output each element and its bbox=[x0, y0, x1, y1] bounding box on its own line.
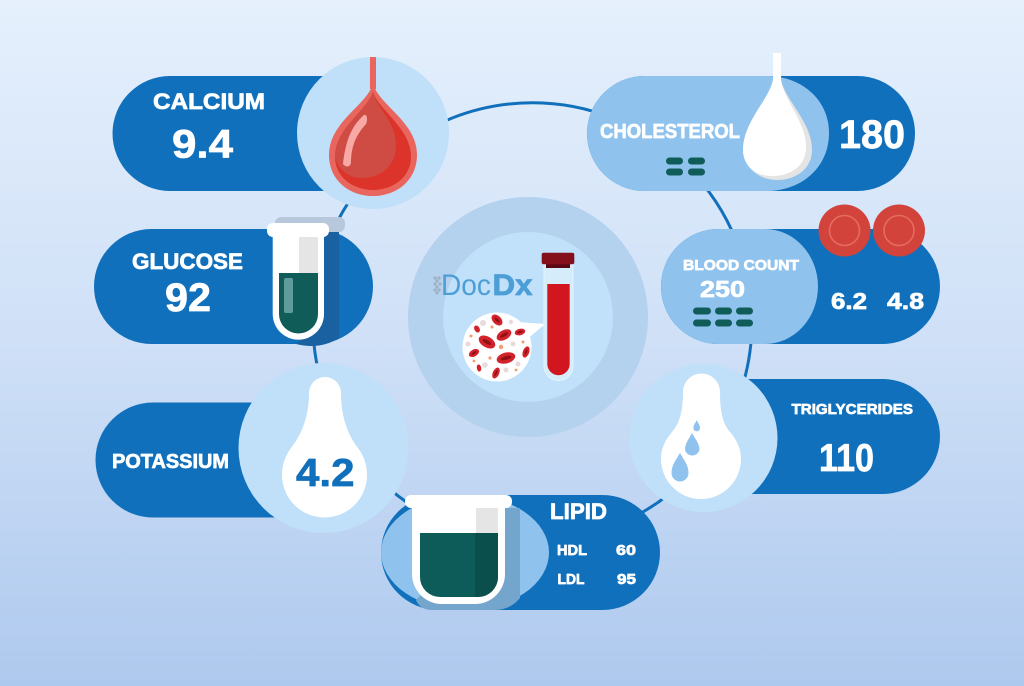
icon: red blood cell one bbox=[818, 204, 870, 256]
panel: center logo and blood sample bbox=[408, 197, 648, 437]
value: glucose: 92 bbox=[165, 276, 211, 320]
pill background bbox=[661, 229, 940, 344]
value: 250: 250 bbox=[700, 276, 745, 302]
icon: lipid beaker bbox=[405, 495, 512, 604]
label: LDL: LDL bbox=[558, 571, 584, 588]
panel: blood count bbox=[661, 204, 940, 344]
icon: blood test tube bbox=[542, 253, 574, 380]
value: LDL: 95 bbox=[617, 571, 636, 588]
panel: lipid bbox=[381, 495, 660, 610]
icon circle bbox=[238, 363, 408, 533]
icon: blood count dashes bbox=[693, 308, 753, 326]
icon: glucose tube bbox=[267, 223, 329, 340]
icon: white bulb bbox=[282, 377, 367, 517]
value: cholesterol: 180 bbox=[839, 113, 905, 157]
label: triglycerides: TRIGLYCERIDES bbox=[792, 401, 913, 418]
icon: magnified blood cells bbox=[462, 312, 545, 382]
label: lipid: LIPID bbox=[550, 499, 607, 524]
panel: potassium bbox=[95, 363, 408, 533]
icon: white drop bbox=[743, 53, 812, 180]
pill background bbox=[113, 76, 340, 191]
light end bbox=[381, 495, 549, 610]
label: cholesterol: CHOLESTEROL bbox=[600, 121, 740, 143]
inner circle bbox=[443, 232, 613, 402]
icon: red blood cell two bbox=[873, 204, 925, 256]
value: 4.8: 4.8 bbox=[887, 288, 924, 314]
logo wordmark: Dx: Dx bbox=[492, 269, 533, 302]
value: 6.2: 6.2 bbox=[831, 288, 867, 314]
connecting ring bbox=[313, 103, 752, 542]
light section bbox=[587, 76, 829, 191]
icon circle bbox=[297, 57, 449, 209]
value: calcium: 9.4 bbox=[172, 122, 234, 166]
panel: calcium bbox=[113, 57, 449, 209]
value: HDL: 60 bbox=[616, 542, 636, 559]
label: HDL: HDL bbox=[557, 542, 587, 559]
label: glucose: GLUCOSE bbox=[132, 249, 243, 274]
pill background bbox=[381, 495, 660, 610]
logo: DocDx bbox=[433, 269, 533, 302]
icon: blood drop bbox=[329, 57, 417, 196]
tube shadow bbox=[296, 229, 339, 346]
icon circle bbox=[630, 364, 778, 512]
pill background bbox=[587, 76, 915, 191]
pill background bbox=[94, 229, 373, 344]
icon: white bulb with drops bbox=[661, 374, 741, 499]
light section bbox=[661, 229, 818, 344]
outer circle bbox=[408, 197, 648, 437]
label: blood count: BLOOD COUNT bbox=[683, 257, 799, 274]
panel: cholesterol bbox=[587, 53, 915, 191]
panel: glucose bbox=[94, 217, 373, 346]
label: potassium: POTASSIUM bbox=[112, 451, 229, 473]
value: triglycerides: 110 bbox=[819, 437, 874, 480]
beaker shadow bbox=[416, 508, 520, 610]
pill background bbox=[740, 379, 940, 494]
icon: DNA mark bbox=[433, 276, 442, 295]
value: potassium: 4.2 bbox=[296, 452, 354, 495]
label: calcium: CALCIUM bbox=[153, 89, 265, 114]
icon: cholesterol dashes bbox=[666, 158, 705, 176]
panel: triglycerides bbox=[630, 364, 940, 512]
pill background bbox=[95, 402, 300, 518]
cap shadow bbox=[275, 217, 345, 232]
logo wordmark: Doc: Doc bbox=[441, 269, 491, 302]
